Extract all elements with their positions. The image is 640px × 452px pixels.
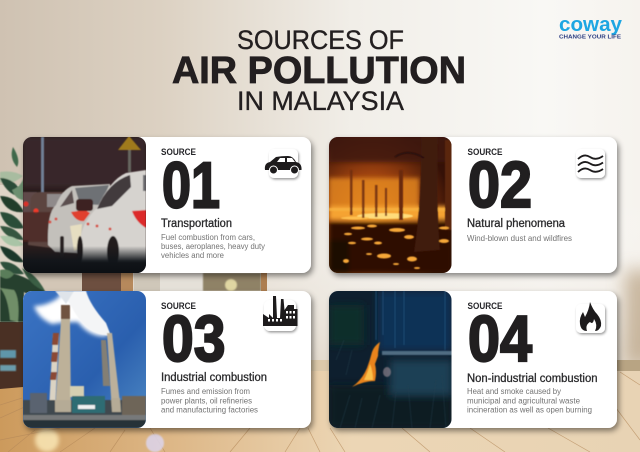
description: Heat and smoke caused by bbox=[467, 387, 561, 396]
description bbox=[467, 387, 592, 414]
logo: Coway: coway bbox=[559, 14, 623, 36]
heading: Natural phenomena bbox=[467, 218, 566, 230]
number 04: 04 bbox=[468, 302, 532, 375]
title bbox=[172, 25, 466, 116]
panel: source 03 industrial combustion bbox=[23, 291, 311, 428]
description: and manufacturing factories bbox=[161, 406, 258, 414]
description: Fuel combustion from cars, bbox=[161, 233, 255, 242]
label: source: SOURCE bbox=[468, 301, 502, 311]
icon: factory bbox=[263, 296, 298, 331]
photo: wildfire bbox=[329, 137, 453, 273]
description: Wind-blown dust and wildfires bbox=[467, 234, 572, 243]
panel: source 01 transportation bbox=[23, 136, 311, 273]
description: vehicles and more bbox=[161, 251, 225, 260]
heading: Industrial combustion bbox=[161, 372, 267, 384]
heading: Transportation bbox=[161, 218, 232, 230]
photo: power plant chimneys bbox=[23, 291, 146, 428]
panel: source 04 non-industrial combustion bbox=[329, 291, 617, 428]
panel: source 02 natural phenomena bbox=[329, 137, 617, 273]
title: AIR POLLUTION bbox=[172, 50, 466, 92]
description bbox=[161, 387, 258, 414]
title: SOURCES OF bbox=[237, 25, 404, 55]
number 02: 02 bbox=[468, 148, 532, 221]
description: Fumes and emission from bbox=[161, 387, 250, 396]
description: power plants, oil refineries bbox=[161, 396, 252, 406]
description: incineration as well as open burning bbox=[467, 406, 592, 414]
photo: traffic jam bbox=[23, 136, 146, 273]
icon: flame bbox=[576, 302, 605, 333]
label: source: SOURCE bbox=[468, 147, 502, 157]
label: source: SOURCE bbox=[161, 147, 196, 157]
number 03: 03 bbox=[162, 302, 226, 375]
label: source: SOURCE bbox=[161, 301, 196, 311]
heading: Non-industrial combustion bbox=[467, 373, 598, 385]
potted plant bbox=[0, 147, 46, 322]
number 01: 01 bbox=[162, 148, 220, 222]
description: municipal and agricultural waste bbox=[467, 396, 581, 406]
icon: car bbox=[265, 149, 302, 178]
icon: wind waves bbox=[576, 149, 605, 178]
photo: open burning at night bbox=[329, 291, 452, 428]
logo: Coway: CHANGE YOUR LIFE bbox=[559, 34, 621, 40]
description bbox=[161, 233, 265, 260]
description: buses, aeroplanes, heavy duty bbox=[161, 242, 265, 251]
title: IN MALAYSIA bbox=[237, 86, 404, 116]
